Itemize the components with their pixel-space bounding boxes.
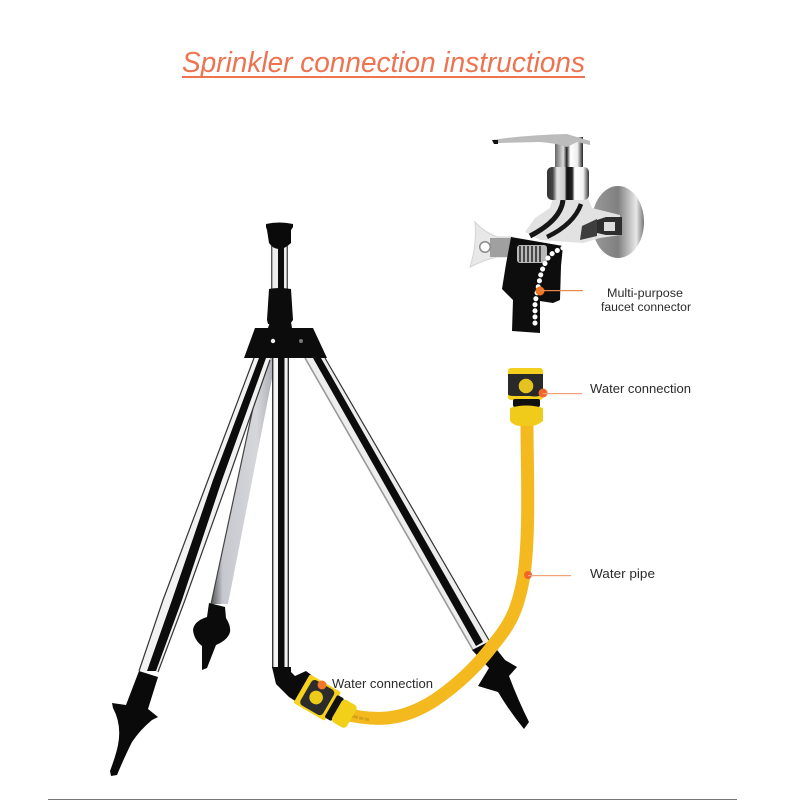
title: Sprinkler connection instructions (182, 47, 585, 79)
connector body (293, 674, 360, 732)
back leg (193, 358, 276, 670)
pipe markings: 8888 88 88 (349, 713, 370, 722)
wing screw (470, 222, 512, 267)
right leg (305, 358, 529, 729)
tripod stand (110, 222, 529, 776)
bottom edge strip (48, 799, 737, 800)
top cap (266, 222, 293, 249)
wall plate (592, 186, 644, 258)
callout: faucet connector: Multi-purpose (607, 288, 683, 300)
callout: faucet connector: faucet connector (601, 302, 691, 314)
spindle (555, 137, 583, 167)
callout: top water connection: Water connection (590, 382, 691, 396)
neck (525, 198, 620, 243)
elbow (272, 667, 326, 709)
callout: faucet connector (536, 286, 691, 314)
bottom hose connector (272, 667, 360, 732)
wall arm (597, 217, 622, 235)
collar (547, 167, 589, 200)
callout: bottom water connection: Water connection (332, 677, 433, 691)
lever handle (492, 134, 590, 147)
multi-purpose faucet connector (502, 237, 563, 333)
water pipe (345, 422, 528, 722)
top tube (271, 246, 288, 290)
collar (267, 288, 293, 324)
callout: top water connection (538, 382, 691, 398)
front centre leg (272, 356, 289, 668)
callout: water pipe (524, 567, 655, 581)
top hose connector (508, 368, 543, 426)
left leg (110, 358, 270, 776)
hub plate (244, 322, 327, 358)
callout: water pipe: Water pipe (590, 567, 655, 581)
faucet (470, 134, 644, 333)
